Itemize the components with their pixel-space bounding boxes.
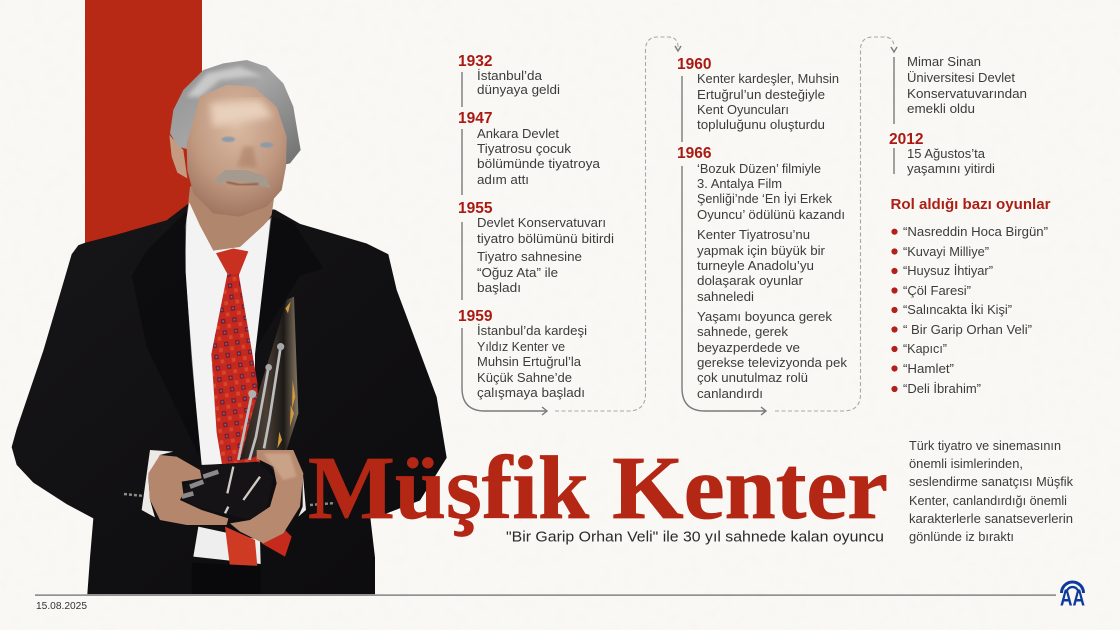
timeline years: 1932 xyxy=(458,53,492,70)
summary paragraph xyxy=(909,438,1073,544)
list of plays: “Hamlet” xyxy=(903,361,954,376)
timeline column 1 text: çalışmaya başladı xyxy=(477,385,585,400)
red vertical band xyxy=(85,0,202,245)
head xyxy=(169,60,301,217)
timeline column 1 text: Devlet Konservatuvarı xyxy=(477,215,606,230)
summary paragraph: Kenter, canlandırdığı önemli xyxy=(909,493,1067,508)
list of plays xyxy=(891,224,1048,396)
logo: Anadolu Agency: AA xyxy=(1060,584,1085,610)
timeline column 2 text: Ertuğrul’un desteğiyle xyxy=(697,87,825,102)
timeline column 1 text: Küçük Sahne’de xyxy=(477,370,572,385)
list of plays: “Nasreddin Hoca Birgün” xyxy=(903,224,1048,239)
timeline years: 1959 xyxy=(458,308,493,325)
torso and jacket xyxy=(12,179,447,594)
timeline years xyxy=(458,53,923,325)
timeline column 1 text: bölümünde tiyatroya xyxy=(477,156,601,171)
timeline column 1 text: Tiyatro sahnesine xyxy=(477,249,582,264)
timeline column 2 text: sahnede, gerek xyxy=(697,324,788,339)
timeline column 3 text: Mimar Sinan xyxy=(907,54,981,69)
list of plays: “Kapıcı” xyxy=(903,341,947,356)
timeline column 2 text: Yaşamı boyunca gerek xyxy=(697,309,832,324)
timeline column 3 text: yaşamını yitirdi xyxy=(907,161,995,176)
timeline column 2 text: dolaşarak oyunlar xyxy=(697,273,804,288)
timeline column 2 text: Kenter Tiyatrosu’nu xyxy=(697,227,810,242)
timeline years: 1955 xyxy=(458,200,493,217)
subtitle: "Bir Garip Orhan Veli" ile 30 yıl sahnede kalan oyuncu xyxy=(506,530,884,546)
timeline column 2 text: Kenter kardeşler, Muhsin xyxy=(697,71,839,86)
timeline column 2 text: 3. Antalya Film xyxy=(697,176,782,191)
timeline column 1 text: İstanbul’da kardeşi xyxy=(477,323,587,338)
date: 15.08.2025 xyxy=(36,601,87,612)
timeline column 1 text: Muhsin Ertuğrul’la xyxy=(477,354,582,369)
timeline column 2 text: canlandırdı xyxy=(697,386,763,401)
timeline column 2 text: beyazperdede ve xyxy=(697,340,800,355)
timeline column 2 text: yapmak için büyük bir xyxy=(697,243,826,258)
portrait illustration: man holding trophy xyxy=(12,60,447,594)
timeline column 2 text: gerekse televizyonda pek xyxy=(697,355,847,370)
timeline column 1 text: İstanbul’da xyxy=(477,68,543,83)
summary paragraph: Türk tiyatro ve sinemasının xyxy=(909,438,1061,453)
timeline column 2 text: topluluğunu oluşturdu xyxy=(697,117,825,132)
timeline column 1 text: Ankara Devlet xyxy=(477,126,559,141)
summary paragraph: seslendirme sanatçısı Müşfik xyxy=(909,474,1073,489)
list of plays: “Deli İbrahim” xyxy=(903,381,981,396)
timeline years: 2012 xyxy=(889,131,923,148)
list of plays: “Çöl Faresi” xyxy=(903,283,971,298)
timeline column 2 text: Oyuncu’ ödülünü kazandı xyxy=(697,207,845,222)
timeline column 1 text: adım attı xyxy=(477,172,529,187)
list of plays: “ Bir Garip Orhan Veli” xyxy=(903,322,1032,337)
timeline column 1 text: dünyaya geldi xyxy=(477,82,560,97)
timeline column 1 text xyxy=(477,68,614,400)
pocket stitching xyxy=(124,494,335,505)
summary paragraph: önemli isimlerinden, xyxy=(909,456,1023,471)
timeline column 2 text: ‘Bozuk Düzen’ filmiyle xyxy=(697,161,821,176)
timeline column 3 text: 15 Ağustos’ta xyxy=(907,146,986,161)
timeline column 1 text: Tiyatrosu çocuk xyxy=(477,141,571,156)
trophy and hands xyxy=(142,297,306,594)
timeline years: 1947 xyxy=(458,110,492,127)
timeline column 1 text: tiyatro bölümünü bitirdi xyxy=(477,231,614,246)
summary paragraph: karakterlerle sanatseverlerin xyxy=(909,511,1073,526)
timeline column 3 text xyxy=(907,54,1027,176)
timeline years: 1966 xyxy=(677,145,712,162)
timeline column 1 text: “Oğuz Ata” ile xyxy=(477,265,558,280)
timeline connectors xyxy=(462,37,897,415)
summary paragraph: gönlünde iz bıraktı xyxy=(909,529,1014,544)
timeline column 2 text: çok unutulmaz rolü xyxy=(697,370,808,385)
list of plays: “Kuvayi Milliye” xyxy=(903,244,989,259)
heading: roles: Rol aldığı bazı oyunlar xyxy=(890,196,1051,213)
timeline column 1 text: başladı xyxy=(477,280,521,295)
timeline column 1 text: Yıldız Kenter ve xyxy=(477,339,565,354)
list of plays: “Huysuz İhtiyar” xyxy=(903,263,993,278)
title: Müşfik Kenter xyxy=(308,439,888,538)
list of plays: “Salıncakta İki Kişi” xyxy=(903,302,1012,317)
timeline years: 1960 xyxy=(677,56,711,73)
timeline column 3 text: Üniversitesi Devlet xyxy=(907,70,1015,85)
timeline column 2 text xyxy=(697,71,847,401)
footer line xyxy=(35,594,1056,596)
timeline column 2 text: sahneledi xyxy=(697,289,754,304)
timeline column 3 text: emekli oldu xyxy=(907,101,975,116)
timeline column 3 text: Konservatuvarından xyxy=(907,86,1027,101)
timeline column 2 text: Kent Oyuncuları xyxy=(697,102,789,117)
timeline column 2 text: turneyle Anadolu’yu xyxy=(697,258,814,273)
timeline column 2 text: Şenliği’nde ‘En İyi Erkek xyxy=(697,191,832,206)
